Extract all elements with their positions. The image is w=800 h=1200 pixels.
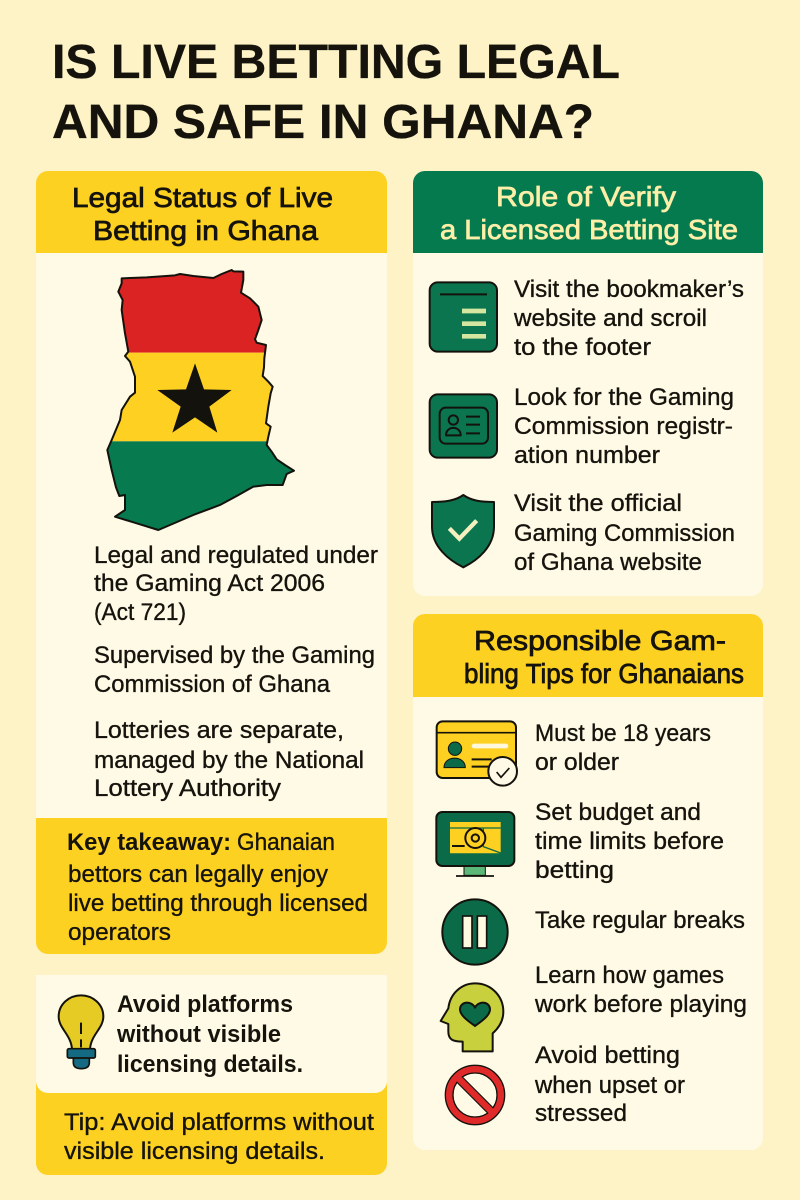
- icon: light bulb: [59, 995, 103, 1069]
- text: legal facts: Legal and regulated under: [94, 542, 378, 569]
- panel: tip: [36, 975, 387, 1175]
- text: avoid upset: [534, 1042, 685, 1127]
- text: legal facts: Commission of Ghana: [94, 671, 331, 698]
- text: learn games: work before playing: [534, 991, 747, 1018]
- callout: key takeaway: operators: [68, 919, 171, 946]
- icon: monitor with budget: [436, 812, 514, 876]
- heading: verify licensed site: a Licensed Betting Site: [440, 214, 738, 245]
- text: learn games: [534, 962, 747, 1018]
- callout: key takeaway: Ghanaian: [237, 829, 335, 856]
- text: avoid upset: Avoid betting: [535, 1042, 680, 1069]
- tip text: visible licensing details.: [64, 1138, 325, 1165]
- text: age: [535, 720, 711, 776]
- text: legal facts: (Act 721): [94, 599, 186, 626]
- text: legal facts: Supervised by the Gaming: [94, 642, 375, 669]
- text: legal facts: [94, 542, 378, 802]
- text: step 3: Visit the official: [514, 490, 682, 517]
- heading: responsible gambling: Responsible Gam-: [474, 625, 726, 656]
- text: step 3: of Ghana website: [514, 549, 702, 576]
- heading: legal status: Betting in Ghana: [93, 215, 318, 246]
- warning box: [36, 975, 387, 1093]
- text: legal facts: managed by the National: [94, 747, 364, 774]
- icon: website footer: [430, 282, 497, 352]
- heading: legal status: [36, 171, 387, 253]
- text: step 2: Look for the Gaming: [514, 384, 734, 411]
- text: budget: [535, 799, 724, 884]
- text: learn games: Learn how games: [535, 962, 724, 989]
- heading: responsible gambling: [413, 614, 763, 697]
- text: age: or older: [535, 749, 619, 776]
- heading: verify licensed site: [413, 171, 763, 253]
- icon: registration card: [430, 394, 497, 458]
- icon: pause: [442, 899, 508, 965]
- text: step 1: website and scroil: [513, 305, 707, 332]
- title: [52, 36, 620, 149]
- icon: prohibited sign: [445, 1065, 505, 1125]
- text: step 2: [514, 384, 734, 469]
- heading: responsible gambling: bling Tips for Ghanaians: [464, 658, 744, 689]
- text: legal facts: Lottery Authority: [94, 775, 281, 802]
- map of Ghana with flag colours: [100, 263, 300, 535]
- text: step 2: Commission registr-: [514, 413, 733, 440]
- icon: shield check: [432, 495, 494, 567]
- text: budget: Set budget and: [535, 799, 701, 826]
- text: age: Must be 18 years: [535, 720, 711, 747]
- panel: responsible gambling tips: [413, 614, 763, 1150]
- heading: legal status: Legal Status of Live: [72, 182, 333, 213]
- panel: legal status: [36, 171, 387, 954]
- text: step 3: [514, 490, 735, 576]
- tip text: Tip: Avoid platforms without: [64, 1109, 374, 1136]
- heading: verify licensed site: Role of Verify: [496, 181, 676, 212]
- text: breaks: Take regular breaks: [535, 907, 745, 934]
- title: IS LIVE BETTING LEGAL: [52, 36, 620, 89]
- callout: key takeaway: Key takeaway:: [67, 829, 231, 856]
- callout: key takeaway: live betting through licensed: [68, 890, 368, 917]
- text: step 1: to the footer: [514, 334, 651, 361]
- text: step 1: [513, 276, 744, 361]
- text: step 2: ation number: [514, 442, 660, 469]
- text: legal facts: Lotteries are separate,: [94, 717, 344, 744]
- text: step 1: Visit the bookmaker’s: [514, 276, 744, 303]
- text: budget: time limits before: [535, 828, 724, 855]
- text: avoid upset: stressed: [535, 1100, 627, 1127]
- callout: key takeaway: [36, 818, 387, 954]
- panel: verify licensed site: [413, 171, 763, 596]
- icon: head with heart: [441, 983, 503, 1051]
- text: legal facts: the Gaming Act 2006: [94, 570, 325, 597]
- callout: key takeaway: bettors can legally enjoy: [68, 861, 328, 888]
- warning box: Avoid platforms: [117, 991, 293, 1018]
- text: budget: betting: [535, 857, 614, 884]
- icon: age ID card: [437, 721, 517, 786]
- warning box: without visible: [116, 1021, 281, 1048]
- tip text: [64, 1109, 374, 1165]
- text: step 3: Gaming Commission: [514, 520, 735, 547]
- title: AND SAFE IN GHANA?: [52, 96, 594, 149]
- warning box: licensing details.: [117, 1051, 303, 1078]
- text: avoid upset: when upset or: [534, 1072, 685, 1099]
